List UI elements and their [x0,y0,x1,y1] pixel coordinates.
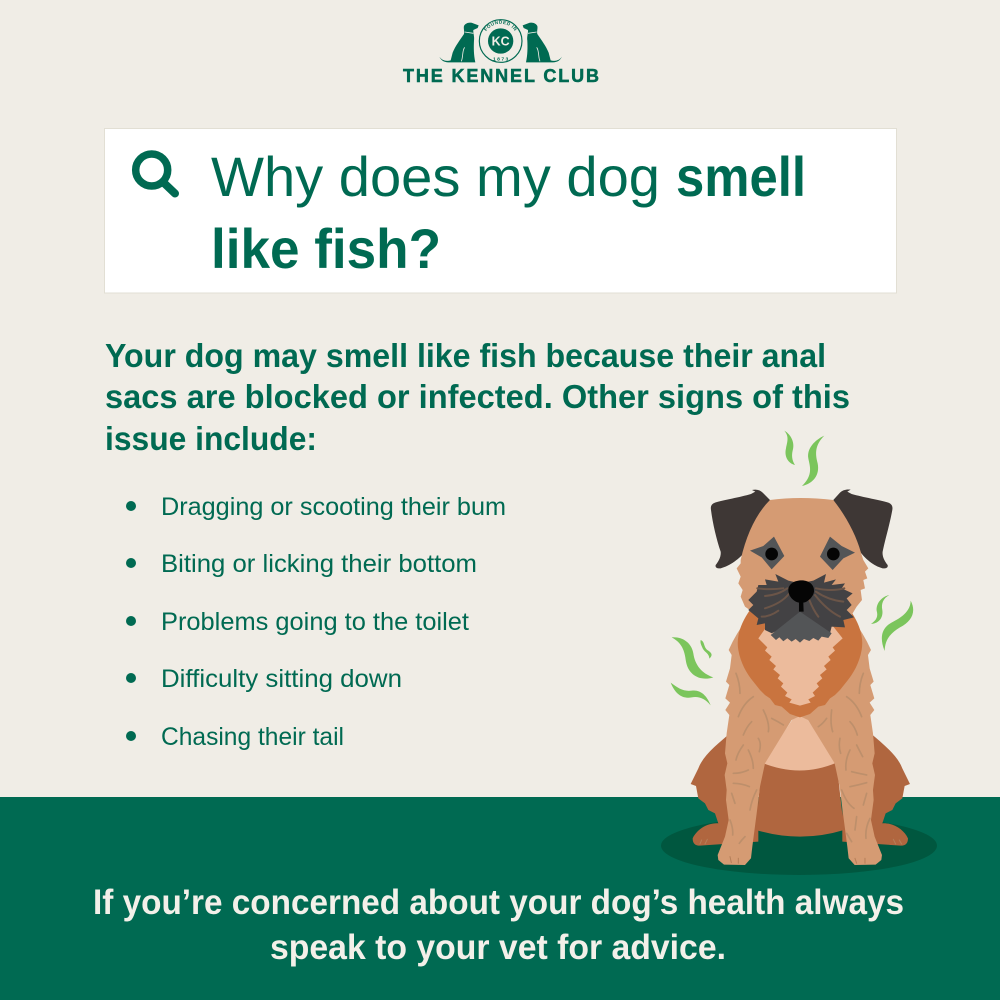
chin [771,612,832,643]
symptoms list: Biting or licking their bottom [161,550,477,578]
odour: right large [882,601,913,651]
right front leg and shoulder [798,625,882,865]
head [737,498,868,615]
left eye patch [750,537,784,569]
intro text: issue include: [105,420,317,457]
intro text: sacs are blocked or infected. Other signs of this [105,378,850,415]
odour: right small [871,595,889,624]
eyes [765,548,778,560]
title text: like fish? [211,217,441,280]
icon: founded badge [478,19,523,63]
odour: top right [802,436,824,486]
orange ruff [738,610,862,717]
logo: The Kennel Club [402,19,599,86]
icon: magnifying glass [136,154,175,194]
light bib [758,627,843,706]
chest light patch [755,708,845,775]
icon: founded badge: KC [492,35,510,49]
shadow [661,816,937,875]
illustration: smelly dog [661,431,937,875]
title text: Why does my dog [211,145,660,208]
title text [211,145,806,280]
icon: left dog [439,23,479,62]
fur strokes [700,673,902,863]
icon: founded badge: 1873 [493,56,509,62]
right haunch and back foot [842,733,910,846]
intro text: Your dog may smell like fish because their anal [105,337,826,374]
belly [756,763,844,837]
icon: founded badge: FOUNDED IN [484,20,518,32]
symptoms list: Problems going to the toilet [161,608,469,636]
symptoms list: Chasing their tail [161,723,344,751]
dog body [661,610,937,875]
footer message [93,883,904,967]
symptoms list: Dragging or scooting their bum [161,493,506,521]
left front leg and shoulder [718,625,802,865]
dog head [711,431,913,651]
symptoms list: Difficulty sitting down [161,665,402,693]
odour: left wisps [671,637,713,705]
footer message: If you’re concerned about your dog’s health always [93,883,904,922]
left haunch and back foot [691,733,758,846]
footer message: speak to your vet for advice. [270,928,726,967]
muzzle fur strokes [757,588,844,617]
intro text [105,337,850,457]
footer band [0,797,1000,1000]
symptoms list [126,493,506,751]
icon: right dog [523,23,562,62]
odour: top left [784,431,795,465]
left ear [711,490,770,568]
panel: title box [104,128,896,293]
nose [788,580,814,612]
right eye patch [820,537,855,570]
muzzle [748,574,854,633]
right ear [833,489,892,568]
title text: smell [676,145,806,208]
logo: The Kennel Club: THE KENNEL CLUB [403,66,599,86]
